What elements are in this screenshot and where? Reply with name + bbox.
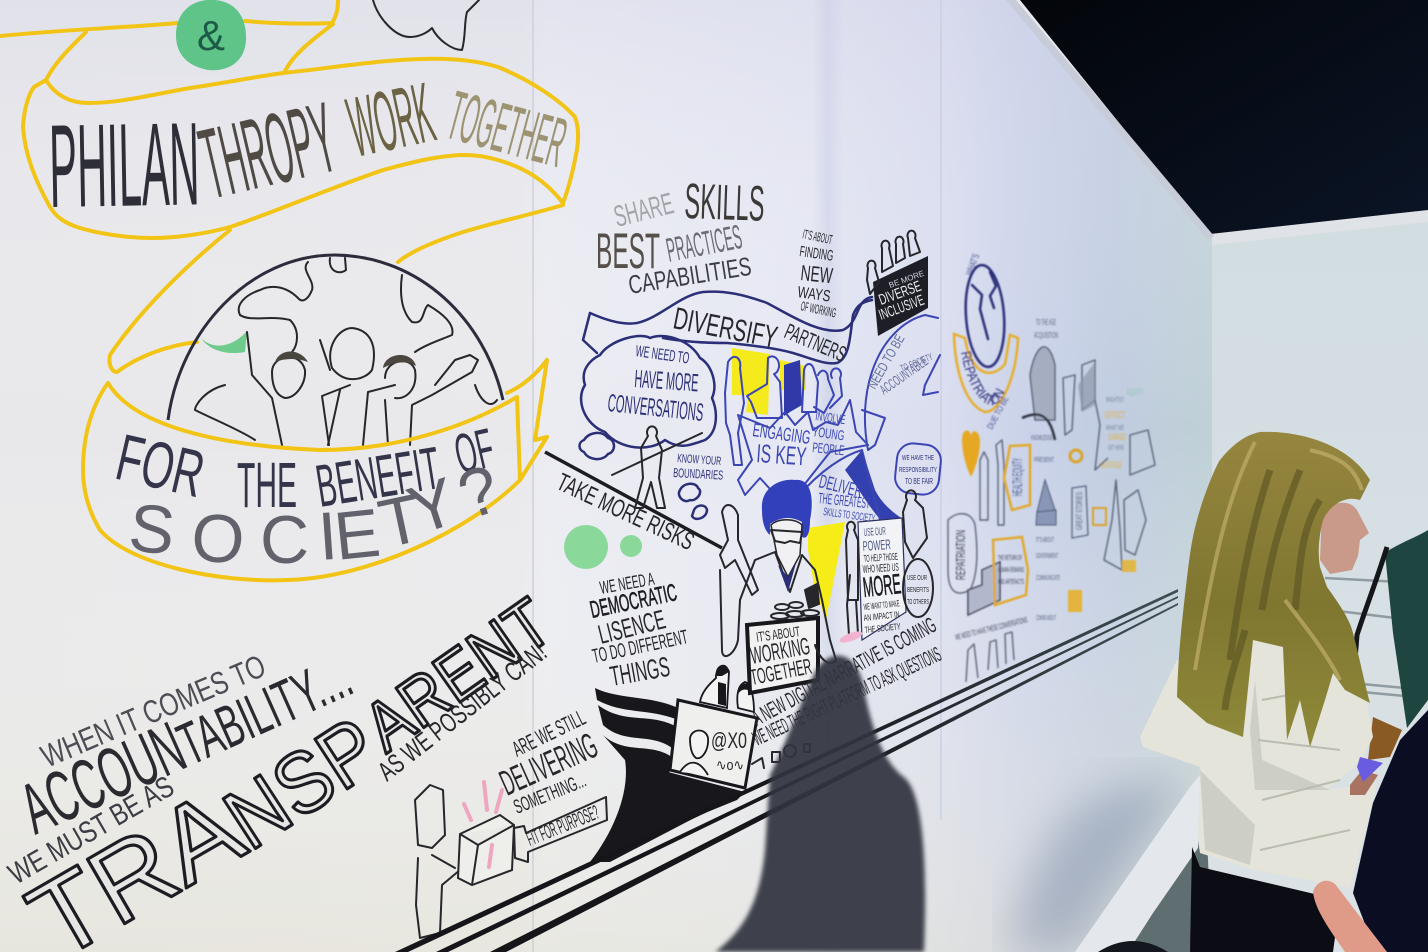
panel: digital narrative laptop	[590, 612, 945, 862]
panel: use our power: USE OUR	[863, 525, 886, 539]
panel: repatriation section: AND ARTEFACTS	[998, 579, 1024, 586]
child centre	[320, 328, 395, 445]
temple	[1036, 480, 1056, 525]
hand	[1350, 770, 1378, 795]
box frame	[747, 618, 818, 693]
partners: PARTNERS	[781, 319, 850, 367]
top ribbon fold	[0, 0, 338, 80]
child right	[385, 355, 478, 445]
panel: repatriation section: KNOWLEDGE	[1031, 435, 1053, 442]
panel: repatriation section: GET HERE	[1108, 445, 1124, 452]
panel: share skills: SKILLS	[684, 173, 766, 232]
benefits text: USE OUR	[907, 575, 927, 582]
green ampersand badge: &	[197, 12, 225, 59]
accountable text 2: ACCOUNTABLE	[877, 353, 931, 397]
face	[771, 520, 802, 577]
children group	[201, 328, 478, 445]
panel: repatriation section: GOVERNMENT	[1036, 553, 1058, 560]
panel: visitors	[1140, 432, 1428, 952]
globe outline	[168, 255, 503, 420]
return box	[993, 537, 1028, 605]
text: society: SOCIETY?	[125, 450, 509, 579]
petri dishes	[771, 584, 819, 619]
museum building	[1030, 347, 1055, 420]
panel: repatriation section: COMMUNICATE	[1036, 575, 1060, 582]
panel: democratic licence	[588, 569, 690, 692]
green ampersand badge	[176, 0, 246, 70]
people behind sign	[867, 231, 920, 294]
deliver: DELIVER	[817, 471, 865, 502]
wall panel seams	[533, 0, 941, 952]
panel: take more risks	[545, 452, 722, 569]
new ways of working: IT'S ABOUT	[801, 226, 834, 247]
when it comes to: WHEN IT COMES TO	[36, 648, 271, 774]
ceiling	[1020, 0, 1428, 238]
black sign	[873, 256, 928, 336]
line 3: NEW	[799, 260, 834, 288]
panel: repatriation section	[946, 252, 1156, 683]
repatriation curve	[961, 350, 1014, 405]
text: of: OF	[449, 416, 500, 486]
pink marks	[464, 782, 502, 867]
side wall	[1150, 218, 1428, 952]
woman	[725, 357, 744, 465]
panel: diversify partners	[583, 231, 928, 367]
panel: share skills: PRACTICES	[663, 218, 745, 270]
panel: repatriation section: HUMAN REMAINS	[998, 567, 1024, 574]
panel: share skills	[596, 173, 838, 320]
ribbon tail	[507, 360, 547, 480]
ribbon connectors	[109, 205, 563, 372]
hair	[1177, 432, 1370, 747]
museum text 2: PRESENT	[1034, 457, 1054, 464]
panel: deliver greatest skills	[797, 450, 880, 525]
orange ring	[1070, 450, 1082, 462]
something: SOMETHING...	[511, 770, 589, 819]
panel: repatriation section: CHANGES	[1108, 432, 1126, 442]
wall ledge	[1075, 775, 1200, 952]
involve young people: INVOLVE	[815, 408, 847, 427]
ribbon outline	[23, 59, 578, 238]
globe	[862, 315, 940, 450]
panel: accountable globe	[845, 315, 942, 528]
strap	[1355, 547, 1387, 660]
are we still: ARE WE STILL	[508, 705, 589, 761]
panel: engaging is key	[725, 348, 868, 500]
green flag	[201, 331, 247, 353]
text: benefit: BENEFIT	[312, 434, 445, 520]
photo of graphic recording wall: WE NEED THE RIGHT PLATFORM TO ASK QUESTIONS	[749, 643, 945, 751]
grey texts: WHAT WE	[1106, 425, 1124, 432]
photo of graphic recording wall: FIT FOR PURPOSE?	[524, 802, 602, 851]
yellow block	[732, 348, 770, 415]
orange texts	[1100, 410, 1126, 470]
parcel	[458, 815, 514, 885]
panel: repatriation section: IT'S ABOUT	[1036, 537, 1054, 544]
blue sweep	[845, 450, 905, 528]
book stacks	[968, 562, 1000, 615]
benefits text 3: TO OTHERS	[907, 599, 929, 606]
share: SHARE	[611, 187, 677, 234]
dark figure right	[1385, 530, 1428, 728]
panel: top banner: WORK	[340, 65, 442, 176]
panel: top banner: PHILAN	[48, 98, 200, 233]
sign line 2: DIVERSE	[877, 278, 924, 309]
small symbols: ∿o∿	[716, 757, 744, 774]
laptop screen	[670, 700, 757, 788]
accountability end: TABILITY....	[168, 643, 362, 778]
grey texts	[1106, 397, 1124, 452]
we must be as: WE MUST BE AS	[3, 770, 180, 891]
presenter figure	[903, 490, 927, 558]
panel: conversations cloud: HAVE MORE	[634, 365, 699, 397]
photo of graphic recording wall: TOGETHER	[440, 76, 574, 182]
line 2: FINDING	[798, 243, 834, 265]
woman jumper	[1140, 613, 1377, 888]
baseline stripes	[395, 589, 1178, 952]
laptop stand mass	[590, 772, 745, 862]
panel: repatriation section: TO THE AGE	[1036, 318, 1056, 327]
blue hair	[762, 480, 812, 538]
foreground dark figure	[1353, 710, 1428, 952]
orange label bottom	[1122, 560, 1136, 572]
panel: accountability text	[3, 583, 565, 952]
panel: repatriation section: EQUITY	[1127, 387, 1143, 397]
panel: conversations cloud: CONVERSATIONS	[606, 389, 705, 427]
child figures	[846, 522, 858, 635]
starburst	[738, 400, 868, 500]
panel: deliver greatest skills: THE GREATEST	[818, 490, 871, 512]
working: WORKING	[748, 633, 812, 670]
box text: GREAT STORIES	[1075, 492, 1084, 530]
panel: repatriation section: WE NEED TO HAVE THESE CONVERSATIONS	[954, 615, 1028, 642]
accountable text: NEED TO BE	[864, 332, 908, 392]
lab coat	[720, 552, 836, 663]
line 4: WAYS	[796, 284, 831, 306]
text: for: FOR	[110, 420, 211, 511]
people behind laptop	[700, 667, 754, 712]
rectangle box	[1072, 486, 1088, 538]
panel: use our power: WE WANT TO MAKE	[863, 598, 900, 612]
benefits circle	[903, 559, 933, 617]
capabilities: CAPABILITIES	[626, 251, 753, 300]
take more risks text: TAKE MORE RISKS	[552, 468, 698, 556]
panel: use our power	[838, 490, 933, 645]
black wave flag	[590, 688, 705, 862]
small cloud	[580, 433, 614, 459]
photo of graphic recording wall: OF WORKING	[799, 298, 838, 320]
health box	[1004, 445, 1030, 510]
impact 3: THE SOCIETY	[864, 621, 901, 635]
hair highlights	[1195, 442, 1362, 680]
yellow block right	[780, 360, 806, 390]
pink mat	[838, 629, 864, 645]
panel: conversations cloud	[580, 336, 724, 519]
speech bubble	[948, 514, 977, 593]
panel: use our power: TO HELP THOSE	[863, 552, 898, 565]
panel: use our power: MORE	[861, 568, 902, 603]
sketch outlines	[1095, 400, 1155, 475]
soft blue shadow near ledge	[1010, 775, 1190, 952]
panel: top banner: THROPY	[191, 81, 346, 220]
responsibility text 2: RESPONSIBILITY	[899, 465, 937, 474]
ribbon top edge	[590, 292, 872, 331]
man handshake	[747, 356, 782, 418]
working together box	[747, 618, 818, 693]
its about: IT'S ABOUT	[755, 623, 801, 645]
sign line 1: BE MORE	[888, 269, 925, 290]
panel: scientist	[720, 480, 845, 663]
symbols on screen: @X0	[711, 728, 747, 753]
ribbon	[954, 334, 1018, 412]
panel: top banner	[0, 0, 578, 372]
accountability start: ACCOUN	[9, 707, 197, 850]
bottles	[980, 440, 1004, 525]
repatriation text: REPATRIATION	[960, 350, 1006, 406]
ribbon bottom edge	[583, 300, 872, 363]
impact 2: AN IMPACT IN	[863, 609, 900, 623]
orange tag box	[1093, 508, 1106, 525]
panel: benefit ribbon	[83, 360, 547, 580]
diagonal rule	[545, 452, 722, 548]
panel: deliver greatest skills: SKILLS TO SOCIETY	[823, 506, 876, 525]
democratic: DEMOCRATIC	[588, 579, 679, 624]
face	[1320, 503, 1369, 574]
woman trousers	[1190, 847, 1340, 952]
grey stack	[1078, 362, 1095, 412]
young: YOUNG	[812, 423, 845, 443]
jumper shading	[1200, 680, 1330, 865]
hair dark streaks	[1225, 470, 1320, 710]
crowd	[802, 364, 842, 413]
side wall top trim	[1210, 210, 1428, 245]
yellow backdrop	[808, 522, 845, 620]
diversify: DIVERSIFY	[671, 301, 780, 355]
video call figure	[680, 730, 708, 775]
side wall rails	[1325, 578, 1405, 696]
globe	[962, 264, 1008, 368]
transparent end: ARENT	[350, 583, 565, 766]
whats label: WHAT'S	[964, 252, 982, 277]
jumper ribs	[1258, 690, 1350, 850]
continents	[195, 258, 497, 440]
to do different: TO DO DIFFERENT	[590, 626, 690, 668]
panel: repatriation section: HEALTH EQUITY	[1009, 458, 1025, 496]
people: PEOPLE	[812, 439, 845, 458]
responsibility text 1: WE HAVE THE	[902, 455, 934, 462]
foreground finger	[1313, 881, 1387, 952]
goggles	[771, 530, 802, 543]
panel: globe with children	[168, 255, 503, 445]
sign line 3: INCLUSIVE	[877, 292, 927, 324]
ribbon outline	[83, 383, 520, 580]
as we possibly can: AS WE POSSIBLY CAN!	[372, 637, 552, 787]
panel: repatriation section: ACQUISITION	[1034, 331, 1058, 340]
panel: use our power: WHO NEED US	[862, 562, 899, 576]
panel: fit for purpose	[415, 705, 607, 938]
know your boundaries: KNOW YOUR	[677, 451, 722, 468]
cloud	[581, 336, 716, 448]
to society: TO SOCIETY	[899, 352, 935, 375]
arrow label shape	[514, 797, 607, 862]
phone	[1357, 757, 1383, 782]
narrative line: A NEW DIGITAL NARRATIVE IS COMING	[748, 612, 940, 730]
green dots	[564, 525, 642, 569]
orange texts: HERITAGE	[1100, 460, 1122, 470]
hair of people	[716, 665, 752, 706]
things: THINGS	[608, 651, 672, 692]
shapes row	[752, 744, 810, 768]
figures group	[725, 356, 842, 465]
shirt	[778, 563, 796, 592]
child left body	[247, 332, 350, 445]
pipette arm	[720, 505, 758, 595]
shadow on wall	[715, 656, 925, 952]
flowing line	[1022, 414, 1055, 440]
striped figure	[612, 426, 702, 508]
panel: repatriation section: THE RETURN OF	[998, 555, 1022, 562]
bubble text: REPATRIATION	[953, 530, 968, 580]
power: POWER	[862, 536, 891, 554]
new ways of working	[796, 226, 838, 320]
transparent middle: NSP	[208, 699, 396, 868]
blue suit	[784, 360, 802, 416]
is key: IS KEY	[756, 438, 808, 471]
benefits text 2: BENEFITS	[907, 587, 929, 594]
bag	[1368, 717, 1402, 760]
orange tag	[1068, 590, 1082, 612]
engaging: ENGAGING	[751, 420, 812, 449]
panel: benefit ribbon: THE	[237, 449, 297, 521]
floor	[1100, 790, 1212, 952]
responsibility bubble	[894, 442, 942, 496]
small cloud pair	[679, 484, 707, 519]
lisence: LISENCE	[595, 604, 668, 650]
child right hair	[383, 355, 416, 368]
heart	[962, 430, 980, 477]
people row	[966, 632, 1014, 682]
we need a: WE NEED A	[598, 569, 656, 598]
together: TOGETHER	[748, 654, 814, 690]
hand sculpture	[1063, 360, 1095, 435]
responsibility text 3: TO BE FAIR	[905, 477, 933, 486]
child left hair	[275, 352, 308, 362]
wall top edge trim	[1006, 0, 1214, 240]
person with parcel	[415, 785, 460, 938]
boundaries: BOUNDARIES	[673, 465, 724, 483]
orange texts: EFFECT	[1105, 410, 1125, 420]
box	[858, 518, 906, 640]
text: we need to: WE NEED TO	[634, 343, 690, 367]
blue arc	[797, 450, 880, 520]
delivering: DELIVERING	[494, 724, 603, 803]
statue	[1104, 480, 1146, 570]
panel: repatriation section: BRIGHTEST	[1106, 397, 1124, 404]
top sketch of figure	[373, 0, 479, 50]
panel: repatriation section: COMMS ABOUT	[1036, 615, 1056, 622]
dark bag on floor	[1098, 941, 1168, 952]
sub text: DUE TO BE	[985, 394, 1011, 431]
panel: share skills: BEST	[596, 223, 660, 279]
